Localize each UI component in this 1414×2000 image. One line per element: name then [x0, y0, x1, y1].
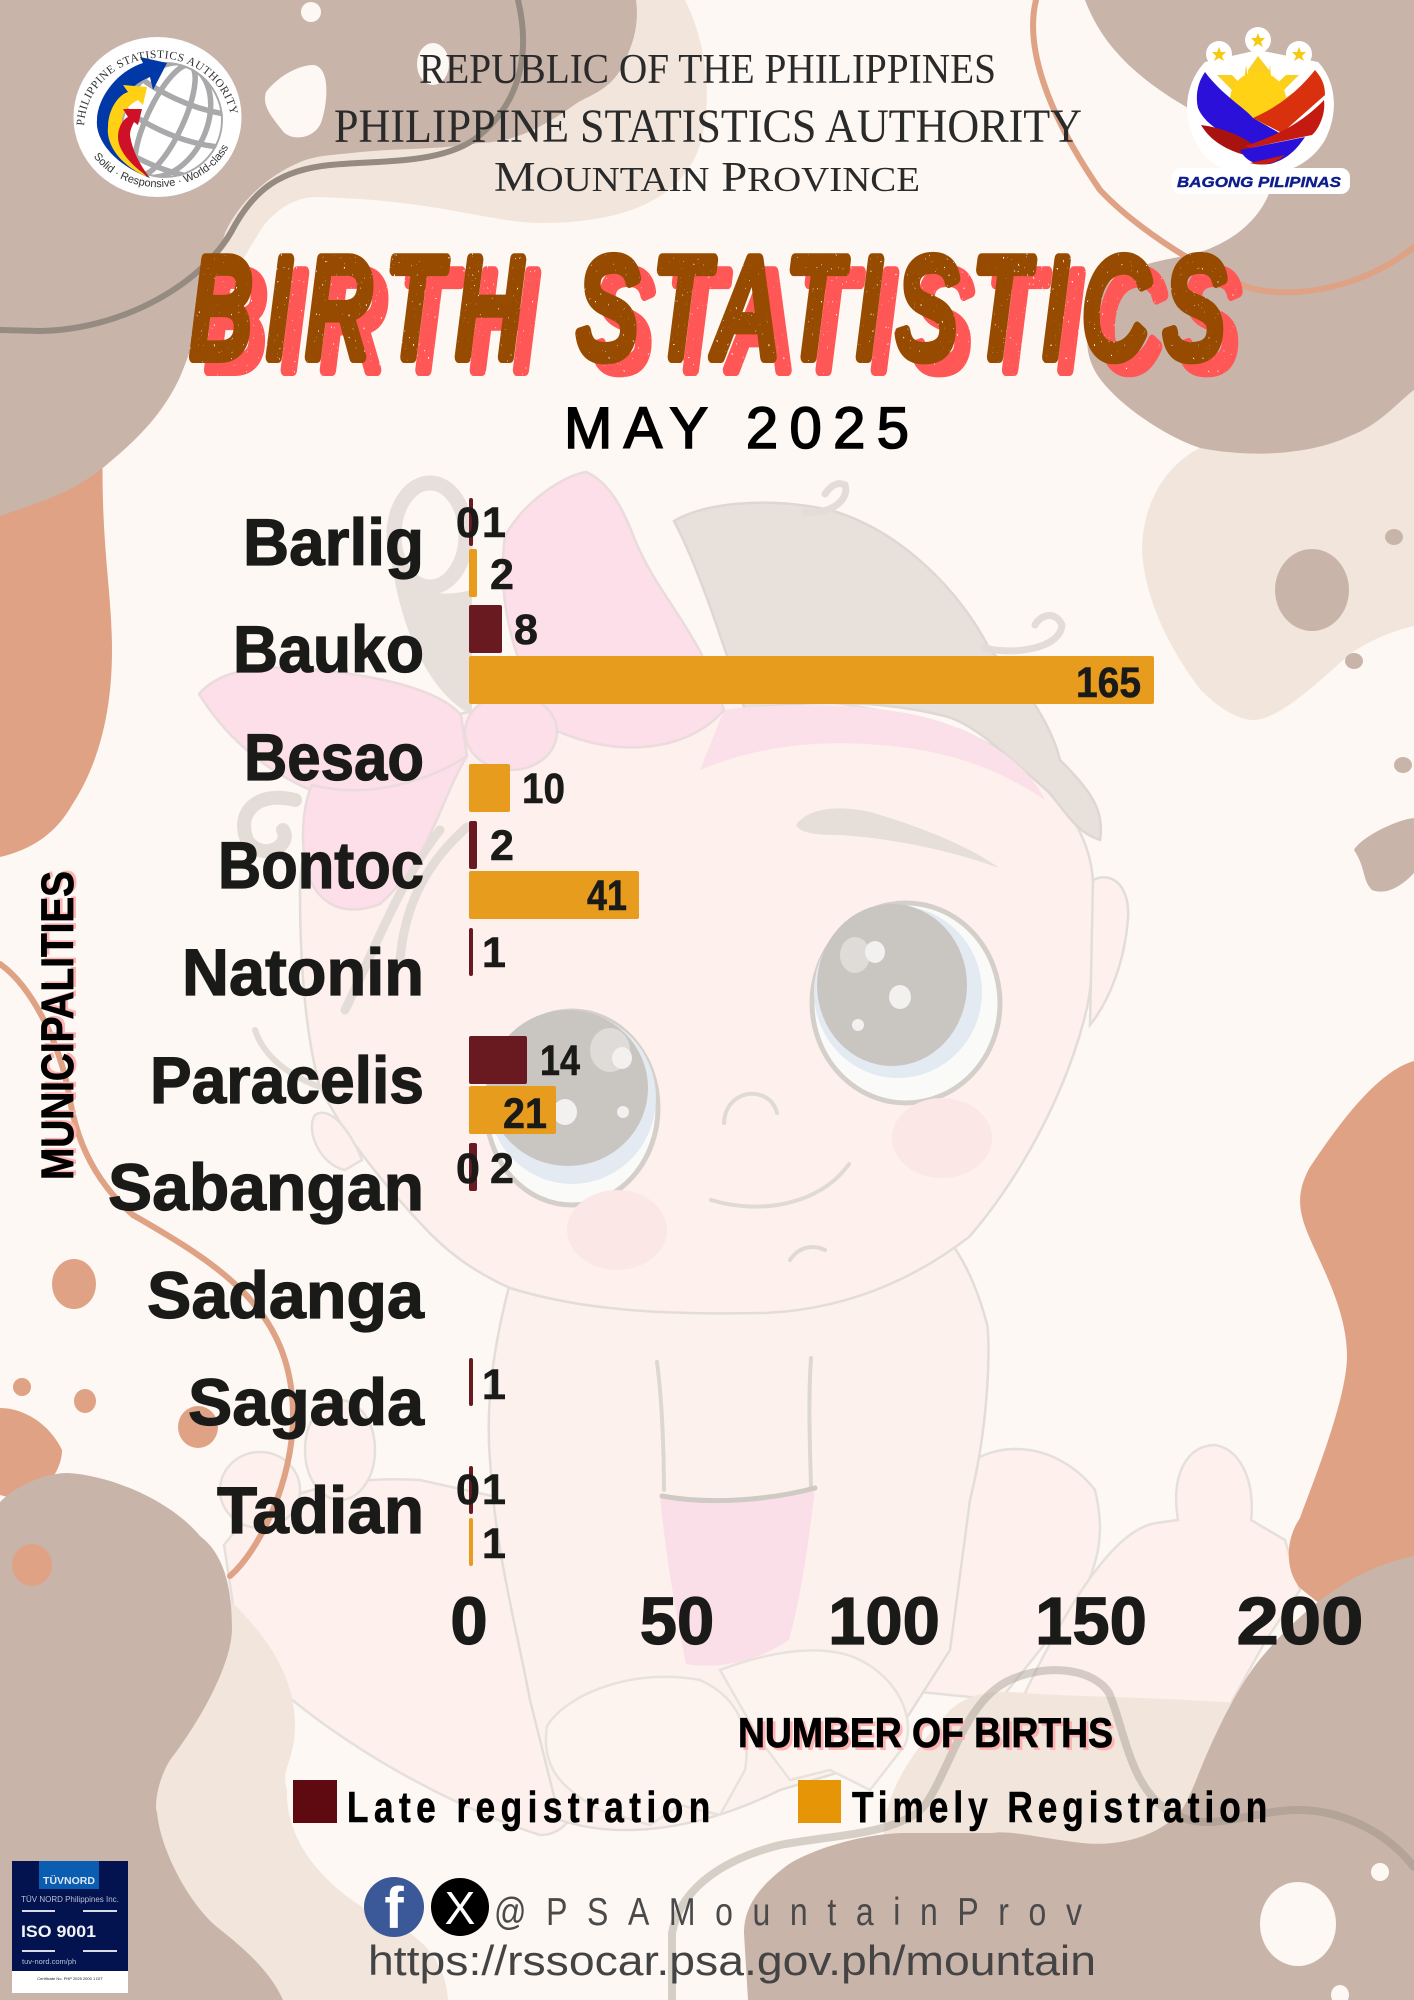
icon: X	[431, 1878, 489, 1936]
logo: Philippine Statistics Authority seal	[74, 37, 242, 197]
category labels: Tadian	[217, 1473, 424, 1547]
timely registration bars	[469, 549, 1154, 1566]
x axis tick labels: 150	[1035, 1584, 1147, 1659]
x axis tick labels: 100	[828, 1584, 940, 1659]
baby hair curls top	[805, 484, 1062, 651]
baby torso	[489, 1225, 988, 1830]
baby hands	[546, 1650, 908, 1825]
baby illustration watermark	[199, 472, 1300, 1835]
legend swatch timely	[798, 1780, 841, 1823]
baby nose and mouth	[711, 1094, 849, 1260]
value labels: 1	[482, 499, 506, 547]
seal globe	[122, 62, 223, 178]
icon: facebook: f	[384, 1876, 404, 1941]
value labels: 1	[482, 1520, 506, 1568]
x axis tick labels: 50	[640, 1584, 714, 1659]
value labels: 2	[490, 822, 514, 870]
header text block	[334, 47, 1082, 201]
value labels	[456, 499, 1141, 1568]
value labels: 8	[514, 606, 538, 654]
baby cheeks	[567, 1098, 992, 1270]
title: BIRTH STATISTICS	[205, 243, 1240, 401]
baby diaper	[660, 1488, 815, 1666]
value labels: 0	[456, 1466, 480, 1514]
stars	[1212, 33, 1306, 61]
category labels: Bauko	[233, 612, 424, 686]
x axis title: NUMBER OF BIRTHS	[741, 1712, 1116, 1759]
header line 3: MOUNTAIN PROVINCE	[494, 155, 920, 201]
baby legs and feet	[220, 1400, 1300, 1835]
category labels: Bontoc	[218, 828, 424, 902]
y axis title: MUNICIPALITIES	[32, 871, 83, 1180]
icon: facebook	[364, 1876, 424, 1941]
title: BIRTH STATISTICS	[190, 230, 1225, 388]
header line 2: PHILIPPINE STATISTICS AUTHORITY	[334, 100, 1082, 153]
category labels: Barlig	[243, 505, 424, 579]
background blobs bottom	[0, 1061, 1414, 2000]
baby arm lines	[657, 1358, 811, 1490]
value labels: 2	[490, 551, 514, 599]
category labels: Besao	[244, 720, 424, 794]
white sticker outline	[1172, 27, 1350, 194]
website url: https://rssocar.psa.gov.ph/mountain	[368, 1937, 1096, 1984]
value labels: 10	[522, 765, 565, 813]
baby headband	[700, 705, 1045, 800]
seal red arrow	[118, 109, 150, 178]
category labels: Sabangan	[108, 1150, 424, 1224]
background blobs top and right	[0, 0, 1414, 892]
baby left eye	[486, 1010, 658, 1205]
badge: ISO 9001: TÜV NORD Philippines Inc.	[21, 1895, 119, 1904]
badge: ISO 9001	[12, 1861, 128, 1993]
logo label: BAGONG PILIPINAS	[1177, 174, 1341, 191]
y axis title: MUNICIPALITIES	[35, 869, 86, 1178]
badge: ISO 9001: ISO 9001	[21, 1922, 96, 1941]
bowl bottom	[1240, 137, 1305, 164]
social handle: @PSAMountainProv	[494, 1890, 1082, 1934]
badge: ISO 9001: Certificate No. PHP 2025 2000 1 DIT	[37, 1976, 103, 1981]
baby right ear	[1090, 877, 1128, 1025]
icon: X: X	[445, 1882, 475, 1934]
legend	[293, 1780, 1267, 1832]
category labels: Sagada	[188, 1365, 425, 1439]
value labels: 21	[503, 1090, 547, 1138]
x axis tick labels: 200	[1236, 1584, 1364, 1659]
value labels: 1	[482, 929, 506, 977]
x axis title: NUMBER OF BIRTHS	[738, 1709, 1113, 1756]
logo: Philippine Statistics Authority seal: PHILIPPINE STATISTICS AUTHORITY	[76, 50, 238, 126]
baby hair	[674, 503, 1101, 840]
value labels: 1	[482, 1466, 506, 1514]
seal blue arrow	[97, 57, 167, 178]
legend swatch late	[293, 1780, 337, 1823]
badge: ISO 9001: tuv-nord.com/ph	[22, 1957, 76, 1966]
header line 1: REPUBLIC OF THE PHILIPPINES	[419, 47, 996, 93]
bar chart	[456, 498, 1154, 1568]
category labels: Natonin	[182, 935, 424, 1009]
blue band	[1197, 72, 1283, 147]
sun disc	[1230, 72, 1286, 128]
legend label late: Late registration	[347, 1783, 710, 1832]
sun rays	[1217, 56, 1299, 106]
baby left ear	[312, 1113, 362, 1170]
category labels: Sadanga	[147, 1258, 425, 1332]
red band	[1253, 70, 1325, 133]
subtitle: MAY 2025	[564, 396, 909, 461]
value labels: 2	[490, 1145, 514, 1193]
value labels: 1	[482, 1361, 506, 1409]
logo: Bagong Pilipinas	[1172, 27, 1350, 194]
value labels: 165	[1076, 659, 1141, 707]
value labels: 0	[456, 1145, 480, 1193]
lower red band	[1201, 125, 1253, 156]
category labels: Paracelis	[150, 1043, 424, 1117]
logo: Philippine Statistics Authority seal: Solid · Responsive · World-class	[94, 145, 228, 188]
badge: ISO 9001: TÜVNORD	[43, 1874, 95, 1887]
value labels: 14	[540, 1037, 580, 1085]
seal yellow arrow	[108, 85, 147, 177]
x axis tick labels: 0	[450, 1584, 488, 1659]
legend label timely: Timely Registration	[852, 1783, 1267, 1832]
seal curved text	[84, 58, 232, 128]
baby eyebrow	[796, 808, 999, 868]
value labels: 0	[456, 499, 480, 547]
baby head	[300, 692, 1093, 1313]
x axis tick labels	[450, 1584, 1364, 1659]
late registration bars	[469, 498, 527, 1514]
value labels: 41	[587, 872, 627, 920]
baby right eye	[812, 903, 1000, 1103]
baby left hair	[244, 483, 472, 1090]
baby bow	[199, 472, 724, 910]
category labels	[108, 505, 425, 1547]
